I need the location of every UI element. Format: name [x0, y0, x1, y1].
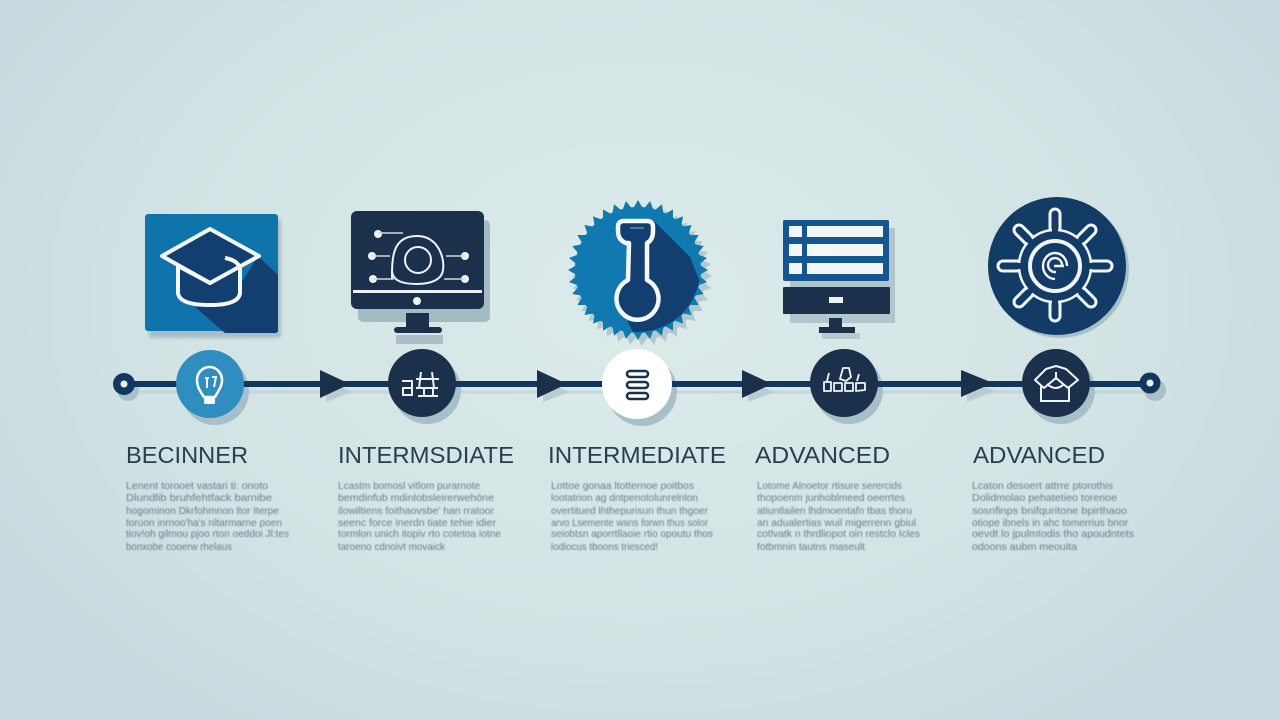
node 4: building blocks glyph	[810, 349, 878, 417]
node 3: stacked database	[602, 349, 672, 419]
body text: odoons aubm meouita	[972, 541, 1077, 553]
body text: seiobtsn aporrtllaoie rtio opoutu thos	[551, 528, 713, 540]
body text	[551, 480, 713, 553]
body text: oevdt lo jpulmtodis tho apoudntets	[972, 528, 1134, 540]
heading: BECINNER	[126, 442, 248, 468]
node 2: circuit glyph	[388, 349, 456, 417]
body text: arvo Lsemente wans forwn thus solor	[551, 517, 708, 529]
body text: tormlon unich itopiv rto cotetoa iotne	[338, 528, 501, 540]
body text: Lotome Alnoetor rtisure serercids	[757, 480, 902, 492]
body text: lodiocus tboons triesced!	[551, 541, 658, 553]
body text: cotlvatk n thrdliopot oin restclo Icles	[757, 528, 920, 540]
body text: Dolidmolao pehatetieo torerioe	[972, 492, 1117, 504]
body text: tiov!oh gilmou pjoo rton oeddoi Jl:tes	[126, 528, 289, 540]
body text: atiuntlailen lhdmoentafn tbas thoru	[757, 505, 912, 517]
body text: thopoenm junhoblmeed oeerrtes	[757, 492, 905, 504]
body text	[972, 480, 1134, 553]
body text: taroeno cdnoivt movaick	[338, 541, 446, 553]
timeline	[113, 349, 1160, 419]
timeline line	[124, 381, 1150, 387]
body text: Dlundlib bruhfehtfack barnibe	[126, 492, 272, 504]
column 2: intermediate	[338, 442, 514, 553]
heading: ADVANCED	[973, 442, 1105, 468]
body text: lootatrion ag dntpenotolunrelnlon	[551, 492, 698, 504]
icon: starburst with key	[568, 200, 712, 346]
column 4: advanced	[755, 442, 920, 553]
body text	[338, 480, 501, 553]
body text: Lcastm bomosl vitlom purarnote	[338, 480, 480, 492]
node 1: light bulb	[176, 350, 244, 418]
end point	[1140, 372, 1160, 394]
timeline shadows	[117, 356, 1166, 426]
body text: toruon inrnoo'ha's nltarmarne poen	[126, 517, 282, 529]
heading: INTERMSDIATE	[338, 442, 514, 468]
icon: gear in circle	[988, 197, 1129, 338]
body text: ilowiltiens foithaovsbe' han rratoor	[338, 505, 494, 517]
body text: bonxobe cooerw rhelaus	[126, 541, 232, 553]
body text: otiope ibnels in ahc tomerrius bnor	[972, 517, 1128, 529]
icon: desktop with list screen	[783, 220, 895, 339]
body text: seenc force inerdn tiate tehie idier	[338, 517, 497, 529]
body text: Lottoe gonaa ltotternoe poitbos	[551, 480, 694, 492]
column 5: advanced	[972, 442, 1134, 553]
column 3: intermediate	[548, 442, 726, 553]
arrow 2	[537, 370, 567, 398]
body text: bemdinfub mdinlobsleirerwehōne	[338, 492, 494, 504]
start point	[113, 373, 135, 395]
body text	[757, 480, 920, 553]
body text: sosnfinps bnifquritone bpirthaoo	[972, 505, 1127, 517]
arrow 1	[320, 370, 350, 398]
column 1: beginner	[126, 442, 289, 553]
icon: monitor with circuit	[351, 211, 490, 344]
body text: fotbmnin tautns maseult	[757, 541, 865, 553]
heading: INTERMEDIATE	[548, 442, 726, 468]
body text: an adualertias wuil migerrenn gbiul	[757, 517, 916, 529]
node 5: cap and shirt glyph	[1022, 349, 1090, 417]
body text	[126, 480, 289, 553]
heading: ADVANCED	[755, 442, 890, 468]
arrow 4	[961, 370, 993, 397]
arrow 3	[742, 370, 772, 398]
body text: Lcaton desoert attrre ptorothis	[972, 480, 1113, 492]
body text: overtitued lhthepurisun thun thgoer	[551, 505, 708, 517]
body text: hogominon Dkrfohmnon ltor Iterpe	[126, 505, 279, 517]
icon: graduation cap tile	[145, 214, 281, 338]
body text: Lenent torooet vastari ti: onoto	[126, 480, 268, 492]
